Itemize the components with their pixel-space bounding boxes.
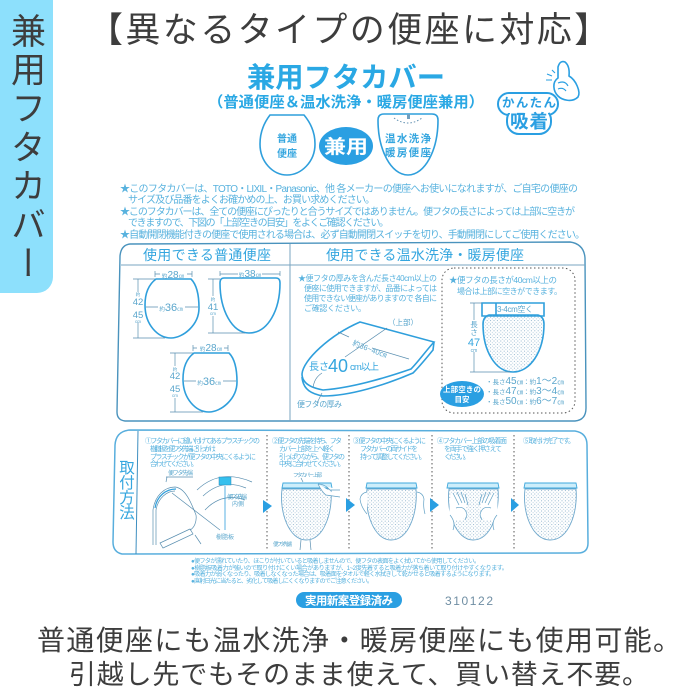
- seat C with dimensions: 約36㎝: [197, 376, 221, 388]
- seat diagram with gap: cm: [471, 348, 477, 354]
- seat A with dimensions: [133, 270, 199, 338]
- panel: usable seats: [117, 242, 586, 421]
- seat C with dimensions: 約28㎝: [200, 343, 223, 354]
- step 1 text: プラスチックが便フタの中央にくるように: [150, 452, 256, 461]
- arrow 3: [430, 498, 439, 512]
- footer text: [37, 625, 681, 690]
- icon: washlet heated seat: 暖房便座: [385, 146, 432, 159]
- dotted box: gap guide: [440, 268, 575, 413]
- icon: regular seat: [260, 115, 315, 175]
- caution notes: ●便フタが濡れていたり、ほこりが付いていると吸着しませんので、便フタの表面をよく拭いてから使用してください。: [191, 557, 480, 565]
- step 2 illustration: 便フタ先端: [273, 540, 292, 548]
- seat A with dimensions: 約: [136, 291, 141, 298]
- seat type diagram: [260, 114, 438, 175]
- step 2 illustration: フタカバー上部: [293, 471, 322, 479]
- text: washlet seat note: ご確認ください。: [304, 303, 366, 313]
- step 3 text: ③便フタの中央にくるように: [353, 436, 426, 445]
- arrow 2: [346, 498, 355, 512]
- badge: かんたん吸着 with pointing hand: [498, 62, 579, 134]
- badge: gap guide: [440, 381, 484, 407]
- icon: regular seat: 普通: [277, 132, 297, 145]
- seat diagram with gap: 47: [468, 337, 480, 349]
- step 3 text: 持って調整してください。: [360, 452, 426, 461]
- step 2 text: カバー上部を上へ軽く: [279, 444, 335, 453]
- step 2 text: ②便フタの先端を持ち、フタ: [272, 436, 342, 445]
- lid illustration: 便フタの厚み: [297, 399, 342, 409]
- list: gap by length: ・長さ45㎝：約1～2㎝: [486, 376, 564, 387]
- seat B with dimensions: [208, 269, 280, 333]
- notes text: サイズ及び品番をよくお確かめの上、お買い求めください。: [128, 193, 375, 206]
- step 3 text: [353, 436, 426, 461]
- step 1 text: 合わせてください。: [150, 459, 198, 468]
- badge: gap guide: 上部空きの: [443, 384, 481, 394]
- caution notes: ●樹脂板吸着力が強いので取り付けにくい場合がありますが、1~2度先着すると吸着力が落ち着いて取り付けやすくなります。: [191, 564, 508, 572]
- footer text: 引越し先でもそのまま使えて、買い替え不要。: [69, 660, 649, 690]
- step 4 illustration: [447, 483, 499, 540]
- badge: utility model registered: 実用新案登録済み: [305, 594, 394, 608]
- step 1 illustration: 内側: [232, 500, 244, 508]
- step 1 illustration: [153, 469, 252, 548]
- badge: かんたん吸着 with pointing hand: 吸着: [510, 111, 548, 132]
- heading: 取付方法: [119, 460, 135, 522]
- step 4 text: [437, 436, 507, 461]
- seat C with dimensions: [170, 343, 237, 412]
- seat B with dimensions: 約38㎝: [239, 269, 262, 280]
- badge: 兼用: 兼用: [324, 136, 368, 158]
- product code: 310122: [445, 594, 493, 608]
- heading: washlet seats: 使用できる温水洗浄・暖房便座: [326, 247, 524, 263]
- notes text: ★このフタカバーは、全ての便座にぴったりと合うサイズではありません。便フタの長さによっては上部に空きが: [120, 205, 575, 218]
- list: gap by length: ・長さ50㎝：約6～7㎝: [486, 396, 564, 407]
- step 4 text: ④フタカバー上部の吸着面: [437, 436, 507, 445]
- caution notes: ●直射日光に当たると、劣化して吸着しにくくなりますのでご注意ください。: [191, 577, 373, 585]
- step 2 illustration: [273, 471, 340, 550]
- seat B with dimensions: 41: [208, 302, 218, 313]
- step 2 text: 引っぱりながら、便フタの: [279, 452, 345, 461]
- step 3 text: フタカバーの両サイドを: [360, 444, 418, 453]
- caution notes: [191, 557, 508, 585]
- lid illustration: cm以上: [350, 362, 379, 373]
- seat A with dimensions: 45: [133, 310, 143, 321]
- lid illustration: 40: [328, 356, 348, 376]
- product heading: [208, 62, 484, 111]
- step 4 text: を両手で強く押さえて: [444, 444, 502, 453]
- heading: 取付方法: 方: [119, 489, 135, 507]
- icon: regular seat: 便座: [277, 147, 297, 160]
- dotted box: gap guide: ★便フタの長さが40cm以上の: [449, 275, 557, 285]
- lid illustration: [297, 318, 434, 409]
- seat A with dimensions: 約36㎝: [159, 302, 183, 314]
- footer text: 普通便座にも温水洗浄・暖房便座にも使用可能。: [37, 625, 681, 656]
- notes text: [120, 182, 585, 241]
- step 2 text: 中央に合わせてください。: [279, 459, 345, 468]
- lid illustration: 約36~40㎝: [351, 338, 389, 360]
- caution notes: ●吸着力が弱くなったり、吸着しなくなった場合は、吸着面をタオルで軽く水拭きして乾かせると吸着するようになります。: [191, 570, 495, 578]
- lid illustration: （上部）: [388, 318, 418, 327]
- list: gap by length: ・長さ47㎝：約3～4㎝: [486, 386, 564, 397]
- step 5 illustration: [524, 483, 577, 540]
- seat A with dimensions: 約28㎝: [162, 270, 185, 281]
- notes text: ★自動開閉機能付きの便座で使用される場合は、必ず自動開閉スイッチを切り、手動開閉にしてご使用ください。: [120, 228, 585, 241]
- arrow 4: [511, 498, 519, 512]
- badge: utility model registered: [296, 592, 402, 608]
- seat C with dimensions: 45: [170, 384, 180, 395]
- list: gap by length: [486, 376, 564, 407]
- badge: かんたん吸着 with pointing hand: かんたん: [502, 96, 556, 110]
- step 1 illustration: 便フタ先端: [168, 469, 193, 477]
- seat diagram with gap: さ: [470, 328, 478, 337]
- lid illustration: 長さ: [309, 361, 329, 373]
- step 1 text: 樹脂板を便フタ先端に引っかけ、: [150, 444, 220, 453]
- step 2 text: [272, 436, 345, 468]
- panel: installation steps: [113, 430, 588, 554]
- product heading: 兼用フタカバー: [247, 62, 445, 93]
- step 5 text: ⑤取付け完了です。: [523, 436, 575, 445]
- heading: 取付方法: 付: [119, 474, 135, 492]
- dotted box: gap guide: 場合は上部に空きができます。: [457, 286, 562, 296]
- text: washlet seat note: ★便フタの厚みを含んだ長さ40cm以上の: [298, 273, 437, 283]
- side tab: 兼用フタカバー: 兼用フタカバー: [6, 13, 45, 284]
- seat C with dimensions: 42: [170, 371, 180, 382]
- side tab: 兼用フタカバー: [0, 0, 53, 293]
- seat diagram with gap: 長: [470, 320, 478, 329]
- seat A with dimensions: cm: [135, 319, 141, 324]
- step 3 illustration: [360, 483, 425, 540]
- heading: 取付方法: 法: [119, 504, 135, 522]
- seat B with dimensions: cm: [210, 311, 216, 316]
- step 1 illustration: 樹脂板: [216, 533, 234, 541]
- product heading: （普通便座＆温水洗浄・暖房便座兼用）: [208, 93, 484, 111]
- notes text: できますので、下図の「上部空きの目安」をよくご確認ください。: [128, 216, 389, 229]
- step 1 text: ①フタカバーに縫い付けてあるプラスチックの: [145, 436, 260, 445]
- seat B with dimensions: 約: [211, 296, 216, 303]
- badge: gap guide: 目安: [454, 394, 470, 404]
- text: washlet seat note: 便座に使用できますが、品番によっては: [304, 283, 437, 293]
- icon: washlet heated seat: [378, 114, 438, 175]
- heading: 取付方法: 取: [119, 460, 135, 477]
- title: 【異なるタイプの便座に対応】: [88, 11, 612, 50]
- text: washlet seat note: 使用できない便座がありますので 各自に: [304, 293, 437, 303]
- seat diagram with gap: 3-4cm空く: [497, 305, 533, 314]
- text: washlet seat note: [298, 273, 437, 313]
- step 1 illustration: 便フタ先端: [227, 493, 247, 501]
- seat diagram with gap: [468, 303, 544, 372]
- heading: regular seats: 使用できる普通便座: [143, 247, 271, 263]
- seat C with dimensions: cm: [172, 393, 178, 398]
- icon: washlet heated seat: 温水洗浄: [385, 132, 432, 145]
- arrow 1: [263, 500, 272, 513]
- seat C with dimensions: 約: [173, 366, 178, 373]
- badge: 兼用: [319, 127, 373, 165]
- step 1 text: [145, 436, 260, 468]
- step 4 text: ください。: [444, 453, 470, 461]
- notes text: ★このフタカバーは、TOTO・LIXIL・Panasonic、他 各メーカーの便座へお使いになれますが、ご自宅の便座の: [120, 182, 578, 195]
- seat A with dimensions: 42: [133, 297, 143, 308]
